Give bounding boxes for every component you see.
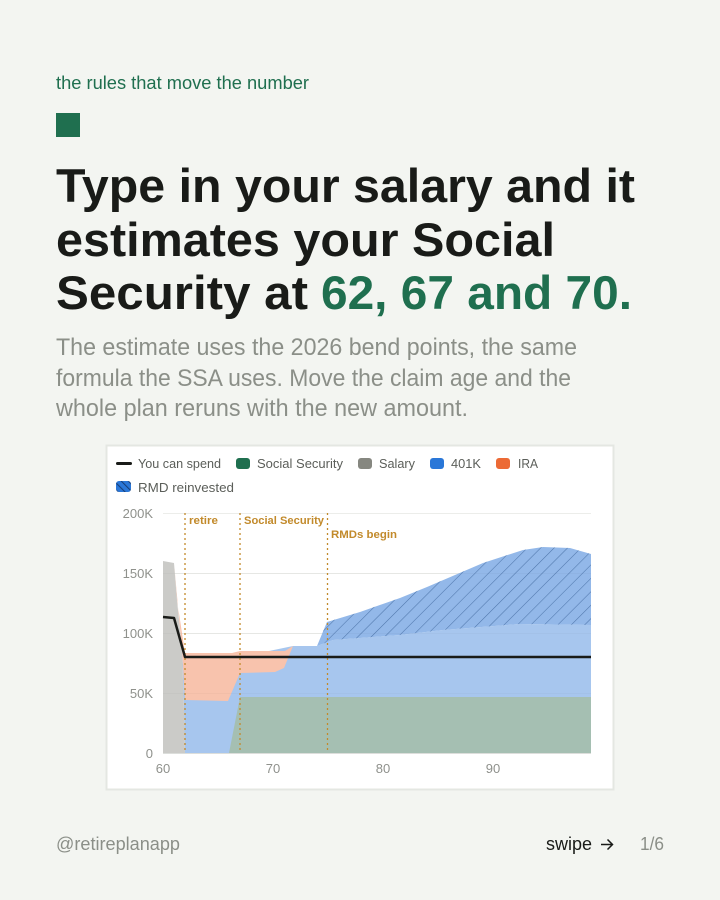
kicker: the rules that move the number <box>56 73 309 93</box>
swipe: swipe <box>546 834 592 854</box>
milestone markers <box>185 513 328 753</box>
grid lines <box>163 514 591 694</box>
area: 401K <box>182 624 591 753</box>
page number: 1/6 <box>640 834 664 854</box>
grid lines over areas <box>163 574 591 694</box>
legend: IRA <box>518 456 538 471</box>
y axis labels <box>123 506 153 761</box>
y axis labels: 200K <box>123 506 153 521</box>
y axis labels: 100K <box>123 626 153 641</box>
x axis labels: 70 <box>266 761 280 776</box>
icon: arrow <box>601 840 612 850</box>
legend: Social Security <box>257 456 343 471</box>
handle: @retireplanapp <box>56 834 180 854</box>
legend <box>116 456 538 495</box>
milestone labels <box>189 515 397 541</box>
area: IRA <box>174 563 293 701</box>
milestone labels: RMDs begin <box>331 529 397 541</box>
title: Security at <box>56 266 308 319</box>
y axis labels: 50K <box>130 686 153 701</box>
x axis labels: 80 <box>376 761 390 776</box>
x axis labels: 90 <box>486 761 500 776</box>
subtitle: whole plan reruns with the new amount. <box>55 395 468 422</box>
milestone labels: Social Security <box>244 515 325 527</box>
title: 62, 67 and 70. <box>321 266 632 319</box>
panel: chart card <box>106 446 614 790</box>
y axis labels: 150K <box>123 566 153 581</box>
legend: You can spend <box>138 456 221 471</box>
x axis labels <box>156 761 500 776</box>
y axis labels: 0 <box>146 746 153 761</box>
title: estimates your Social <box>56 213 555 266</box>
milestone labels: retire <box>189 515 218 527</box>
axis baseline <box>163 752 591 754</box>
area: Social Security <box>229 697 591 753</box>
subtitle: formula the SSA uses. Move the claim age and the <box>56 365 571 392</box>
line: you can spend <box>163 617 591 657</box>
x axis labels: 60 <box>156 761 170 776</box>
title <box>56 159 635 319</box>
legend: 401K <box>451 456 481 471</box>
accent square <box>56 113 80 137</box>
title: Type in your salary and it <box>56 159 635 212</box>
subtitle: The estimate uses the 2026 bend points, the same <box>56 334 577 361</box>
legend: Salary <box>379 456 415 471</box>
area: Salary <box>163 561 185 753</box>
legend: RMD reinvested <box>138 480 234 495</box>
area: RMD reinvested <box>317 547 591 646</box>
subtitle <box>55 334 577 422</box>
